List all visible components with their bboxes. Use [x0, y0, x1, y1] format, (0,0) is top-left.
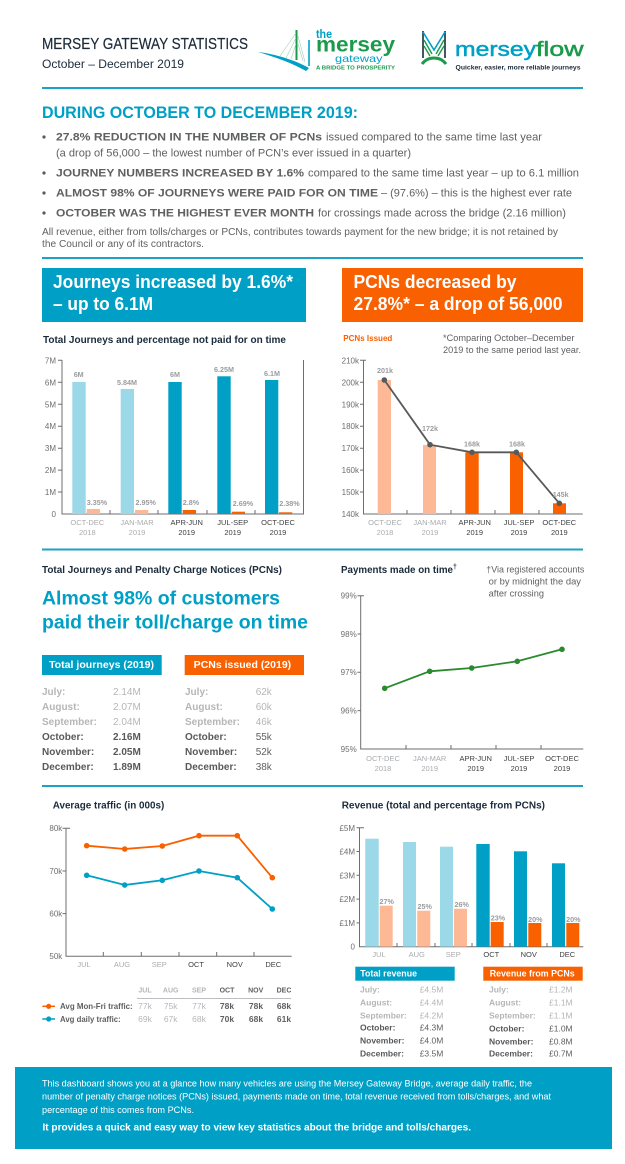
chart: total journeys: 1M	[45, 488, 56, 497]
chart: total journeys: 7M	[45, 356, 56, 365]
chart: PCNs issued: JAN-MAR	[413, 518, 447, 527]
chart: payments made on time: OCT-DEC	[545, 754, 579, 763]
header title	[42, 36, 248, 71]
chart: revenue: SEP	[446, 950, 461, 959]
chart: average traffic	[49, 799, 292, 969]
chart: PCNs issued: OCT-DEC	[368, 518, 402, 527]
chart: revenue: 25%	[418, 902, 432, 911]
chart: payments made on time: 97%	[341, 668, 357, 677]
chart: average traffic: JUL	[77, 960, 91, 969]
table: total revenue: £4.2M	[420, 1010, 443, 1020]
chart: PCNs issued: 2019	[551, 528, 568, 537]
chart: PCNs issued: 2019	[466, 528, 483, 537]
footer panel: This dashboard shows you at a glance how many vehicles are using the Mersey Gateway Bridge, average daily traffic, the	[42, 1078, 532, 1088]
chart: revenue: 26%	[455, 900, 469, 909]
table: total journeys: September:	[42, 717, 97, 728]
chart: total journeys: 2018	[79, 528, 96, 537]
chart: PCNs issued: JUL-SEP	[504, 518, 534, 527]
chart: total journeys: JAN-MAR	[120, 518, 154, 527]
table: PCNs issued: 55k	[256, 732, 273, 743]
table: PCNs issued: November:	[185, 747, 237, 758]
chart: total journeys: 6.25M	[214, 365, 234, 374]
chart: payments made on time: 2019	[467, 764, 484, 773]
chart: revenue: £2M	[339, 895, 355, 904]
table: average traffic: 70k	[220, 1014, 234, 1024]
table: revenue from PCNs: £1.1M	[549, 1011, 573, 1021]
table: revenue from PCNs: £1.2M	[549, 984, 573, 994]
table: total revenue: November:	[360, 1035, 405, 1045]
chart: total journeys: 2.8%	[183, 498, 200, 507]
summary bullets	[42, 132, 579, 220]
table: revenue from PCNs: July:	[489, 984, 509, 994]
chart: revenue	[339, 799, 583, 959]
table: average traffic	[42, 988, 291, 1024]
chart: payments made on time: 2019	[511, 764, 527, 773]
table: total revenue: July:	[360, 984, 380, 994]
revenue note: the Council or any of its contractors.	[42, 239, 204, 250]
chart: payments made on time: APR-JUN	[459, 754, 492, 763]
footer panel: It provides a quick and easy way to view key statistics about the bridge and tolls/charges.	[42, 1122, 471, 1134]
chart: average traffic: Average traffic (in 000s)	[53, 799, 164, 811]
table: revenue from PCNs: £1.0M	[549, 1023, 573, 1033]
chart: payments made on time: †Via registered accounts	[486, 564, 585, 574]
chart: revenue: £1M	[339, 919, 355, 928]
table: total revenue: December:	[360, 1048, 404, 1058]
chart: revenue: £4M	[339, 848, 355, 856]
chart: total journeys: 0	[52, 510, 57, 519]
chart: total journeys: JUL-SEP	[217, 518, 248, 527]
chart: average traffic: SEP	[152, 960, 167, 969]
chart: payments made on time	[341, 564, 585, 773]
chart: total journeys: 6.1M	[264, 369, 280, 378]
chart: PCNs issued: OCT-DEC	[542, 518, 577, 527]
table: average traffic: DEC	[277, 988, 291, 995]
chart: total journeys: 6M	[45, 378, 56, 387]
summary bullets: JOURNEY NUMBERS INCREASED BY 1.6%	[56, 168, 304, 180]
chart: PCNs issued: 168k	[509, 440, 525, 448]
chart: payments made on time: JAN-MAR	[413, 754, 447, 763]
table: average traffic: 68k	[192, 1014, 207, 1024]
table: revenue from PCNs: August:	[489, 998, 521, 1008]
table: revenue from PCNs: £1.1M	[549, 998, 573, 1008]
table: PCNs issued: 38k	[256, 762, 273, 773]
chart: total journeys: 6M	[170, 370, 180, 379]
chart: total journeys: 2.38%	[279, 499, 300, 508]
table: average traffic: Avg Mon-Fri traffic:	[60, 1001, 133, 1011]
table: PCNs issued: 62k	[256, 687, 273, 698]
table: average traffic: 69k	[138, 1014, 153, 1024]
table: PCNs issued: PCNs issued (2019)	[194, 660, 291, 671]
callout: journeys: Journeys increased by 1.6%*	[53, 272, 293, 292]
chart: revenue: 23%	[491, 914, 506, 922]
chart: average traffic: AUG	[114, 960, 130, 969]
chart: revenue: OCT	[483, 950, 500, 959]
chart: total journeys: 3.35%	[87, 498, 108, 507]
chart: PCNs issued: 168k	[464, 440, 480, 448]
chart: payments made on time: 95%	[341, 745, 357, 754]
table: revenue from PCNs: £0.8M	[549, 1036, 573, 1046]
chart: payments made on time: 2019	[421, 764, 438, 773]
chart: PCNs issued: 145k	[553, 490, 569, 499]
headline: almost 98 percent: Almost 98% of customers	[42, 588, 280, 610]
summary bullets: compared to the same time last year – up to 6.1 million	[308, 168, 579, 180]
table: average traffic: 75k	[164, 1001, 178, 1011]
chart: average traffic: NOV	[227, 960, 243, 969]
chart: average traffic: OCT	[188, 960, 204, 969]
table: average traffic: Avg daily traffic:	[60, 1014, 121, 1024]
chart: total journeys: 5.84M	[117, 378, 137, 387]
chart: PCNs issued: 201k	[377, 366, 393, 375]
chart: total journeys: 2019	[270, 528, 286, 537]
chart: revenue: £5M	[339, 824, 355, 833]
chart: PCNs issued: 2019	[511, 528, 527, 537]
table: PCNs issued: September:	[185, 717, 240, 728]
table: revenue from PCNs: £0.7M	[549, 1048, 573, 1058]
logo: the mersey gateway: mersey	[316, 34, 395, 56]
chart: total journeys: OCT-DEC	[261, 518, 295, 527]
table: total journeys: 2.07M	[113, 702, 141, 713]
chart: PCNs issued: *Comparing October–December	[443, 333, 574, 343]
footer panel: percentage of this comes from PCNs.	[42, 1105, 194, 1115]
table: total journeys: October:	[42, 732, 84, 743]
revenue note: All revenue, either from tolls/charges or PCNs, contributes towards payment for the new bridge; it is not retained by	[42, 227, 558, 238]
summary bullets: for crossings made across the bridge (2.16 million)	[318, 208, 566, 220]
logo: the mersey gateway: A BRIDGE TO PROSPERITY	[316, 65, 395, 71]
table: average traffic: 61k	[277, 1014, 291, 1024]
table: revenue from PCNs	[483, 967, 583, 1058]
table: average traffic: 77k	[138, 1001, 153, 1011]
chart: PCNs issued: 210k	[342, 356, 360, 365]
chart: revenue: Revenue (total and percentage from PCNs)	[342, 799, 545, 811]
chart: revenue: 20%	[528, 915, 543, 924]
callout: journeys	[42, 268, 306, 322]
table: total revenue: Total revenue	[360, 968, 417, 978]
chart: total journeys: 2.69%	[233, 499, 254, 508]
chart: revenue: DEC	[559, 950, 576, 959]
chart: payments made on time: 98%	[341, 630, 357, 639]
chart: payments made on time: JUL-SEP	[504, 754, 534, 763]
chart: revenue: JUL	[372, 950, 386, 959]
chart: PCNs issued: 200k	[342, 378, 360, 387]
table: total journeys: August:	[42, 702, 80, 713]
table: total revenue: £4.4M	[420, 998, 443, 1008]
chart: payments made on time: 2019	[554, 764, 570, 773]
logo: merseyflow: mersey	[455, 38, 537, 61]
chart: PCNs issued: 170k	[342, 444, 360, 453]
chart: revenue: AUG	[409, 950, 425, 959]
table: total journeys: 2.05M	[113, 747, 141, 758]
callout: PCNs: PCNs decreased by	[354, 272, 516, 292]
table: average traffic: 78k	[249, 1001, 263, 1011]
chart: total journeys: Total Journeys and percentage not paid for on time	[43, 335, 286, 346]
table: PCNs issued: July:	[185, 687, 208, 698]
summary bullets: OCTOBER WAS THE HIGHEST EVER MONTH	[56, 208, 314, 220]
table: PCNs issued: December:	[185, 762, 237, 773]
chart: total journeys: APR-JUN	[170, 518, 203, 527]
table: total journeys: 2.16M	[113, 732, 141, 743]
callout: PCNs	[342, 268, 583, 322]
chart: PCNs issued: 140k	[342, 510, 360, 519]
logo: merseyflow: flow	[536, 38, 584, 61]
table: average traffic: NOV	[248, 988, 264, 995]
chart: revenue: 27%	[380, 897, 394, 906]
table: PCNs issued: August:	[185, 702, 223, 713]
table: PCNs issued	[185, 655, 304, 773]
table: revenue from PCNs: Revenue from PCNs	[490, 968, 575, 978]
chart: total journeys: 2019	[224, 528, 241, 537]
chart: payments made on time: OCT-DEC	[366, 754, 400, 763]
chart: PCNs issued: APR-JUN	[458, 518, 491, 527]
chart: average traffic: 80k	[49, 824, 63, 833]
table: revenue from PCNs: December:	[489, 1048, 533, 1058]
chart: average traffic: 50k	[49, 952, 63, 961]
table: total journeys	[42, 655, 162, 773]
chart: payments made on time: after crossing	[489, 589, 544, 599]
table: average traffic: SEP	[192, 988, 206, 995]
footer panel: number of penalty charge notices (PCNs) issued, payments made on time, total revenue received from tolls/charges, and what	[42, 1092, 552, 1102]
table: PCNs issued: 52k	[256, 747, 273, 758]
table: total revenue: October:	[360, 1022, 396, 1032]
footer panel	[15, 1067, 612, 1149]
chart: PCNs issued: PCNs Issued	[343, 333, 392, 343]
chart: revenue: £3M	[339, 871, 355, 880]
chart: total journeys: 4M	[45, 422, 56, 431]
chart: PCNs issued: 180k	[342, 422, 360, 431]
callout: PCNs: 27.8%* – a drop of 56,000	[354, 294, 562, 314]
chart: PCNs issued: 150k	[342, 488, 360, 497]
summary bullets: ALMOST 98% OF JOURNEYS WERE PAID FOR ON TIME	[56, 188, 378, 200]
chart: total journeys: 2019	[178, 528, 195, 537]
chart: PCNs issued: 2019 to the same period last year.	[443, 345, 581, 355]
table: average traffic: 67k	[164, 1014, 178, 1024]
chart: PCNs issued: 160k	[342, 466, 360, 475]
table: total journeys: Total journeys (2019)	[49, 660, 154, 671]
logo: merseyflow	[422, 31, 584, 71]
chart: total journeys: 5M	[45, 400, 56, 409]
revenue note	[42, 227, 558, 250]
table: PCNs issued: 46k	[256, 717, 273, 728]
table: total revenue: £4.3M	[420, 1022, 443, 1032]
chart: payments made on time: Payments made on time	[341, 564, 453, 576]
chart: total journeys: 3M	[45, 444, 56, 453]
summary heading: DURING OCTOBER TO DECEMBER 2019:	[42, 104, 358, 122]
headline: almost 98 percent: paid their toll/charge on time	[42, 612, 308, 634]
table: total journeys: July:	[42, 687, 65, 698]
chart: payments made on time: 96%	[341, 706, 357, 715]
summary bullets: issued compared to the same time last year	[326, 132, 542, 144]
logo: the mersey gateway	[258, 29, 395, 71]
table: average traffic: AUG	[163, 988, 179, 995]
chart: PCNs issued: 172k	[422, 424, 438, 433]
chart: PCNs issued: 190k	[342, 400, 360, 409]
table: revenue from PCNs: November:	[489, 1036, 534, 1046]
table: total journeys: 1.89M	[113, 762, 141, 773]
table: revenue from PCNs: October:	[489, 1023, 525, 1033]
chart: total journeys	[43, 335, 304, 537]
chart: total journeys: 6M	[74, 370, 84, 379]
headline: almost 98 percent	[42, 588, 308, 634]
chart: total journeys: 2.95%	[136, 498, 156, 507]
table: average traffic: 68k	[277, 1001, 291, 1011]
header title: October – December 2019	[42, 59, 184, 71]
logo: merseyflow: Quicker, easier, more reliable journeys	[456, 64, 581, 71]
summary bullets: (a drop of 56,000 – the lowest number of PCN’s ever issued in a quarter)	[56, 148, 411, 160]
table: total revenue: £4.5M	[420, 984, 443, 994]
table: average traffic: OCT	[220, 988, 235, 995]
logo: the mersey gateway: the	[316, 29, 332, 41]
chart: average traffic: 60k	[49, 910, 63, 918]
chart: revenue: 20%	[566, 915, 581, 924]
chart: payments made on time: 99%	[341, 592, 357, 600]
table: average traffic: JUL	[138, 988, 152, 995]
table: total revenue: September:	[360, 1010, 407, 1020]
summary bullets: 27.8% REDUCTION IN THE NUMBER OF PCNs	[56, 132, 322, 144]
table: average traffic: 68k	[249, 1014, 263, 1024]
chart: average traffic: 70k	[49, 867, 63, 876]
table: total revenue	[355, 967, 455, 1058]
chart: revenue: NOV	[521, 950, 537, 959]
chart: PCNs issued: 2018	[377, 528, 393, 537]
summary bullets: – (97.6%) – this is the highest ever rate	[381, 188, 572, 200]
table: total journeys: December:	[42, 762, 94, 773]
chart: total journeys: 2019	[129, 528, 145, 537]
table: average traffic: 77k	[192, 1001, 207, 1011]
chart: payments made on time: 2018	[375, 764, 391, 773]
table: total revenue: £4.0M	[420, 1035, 443, 1045]
section heading: journeys and PCNs: Total Journeys and Penalty Charge Notices (PCNs)	[42, 565, 282, 576]
chart: payments made on time: or by midnight the day	[489, 576, 582, 586]
chart: total journeys: 2M	[45, 466, 56, 475]
callout: journeys: – up to 6.1M	[53, 294, 153, 314]
table: total revenue: August:	[360, 998, 392, 1008]
table: total journeys: 2.14M	[113, 687, 141, 698]
table: total revenue: £3.5M	[420, 1048, 443, 1058]
chart: average traffic: DEC	[265, 960, 282, 969]
table: revenue from PCNs: September:	[489, 1011, 536, 1021]
table: average traffic: 78k	[220, 1001, 234, 1011]
chart: payments made on time: †	[453, 564, 457, 571]
table: PCNs issued: 60k	[256, 702, 273, 713]
chart: total journeys: OCT-DEC	[70, 518, 105, 527]
table: total journeys: November:	[42, 747, 94, 758]
chart: PCNs issued	[342, 333, 583, 537]
chart: revenue: 0	[351, 943, 356, 952]
table: total journeys: 2.04M	[113, 717, 141, 728]
header title: MERSEY GATEWAY STATISTICS	[42, 36, 248, 53]
logo: the mersey gateway: gateway	[335, 53, 383, 65]
table: PCNs issued: October:	[185, 732, 227, 743]
chart: PCNs issued: 2019	[422, 528, 438, 537]
